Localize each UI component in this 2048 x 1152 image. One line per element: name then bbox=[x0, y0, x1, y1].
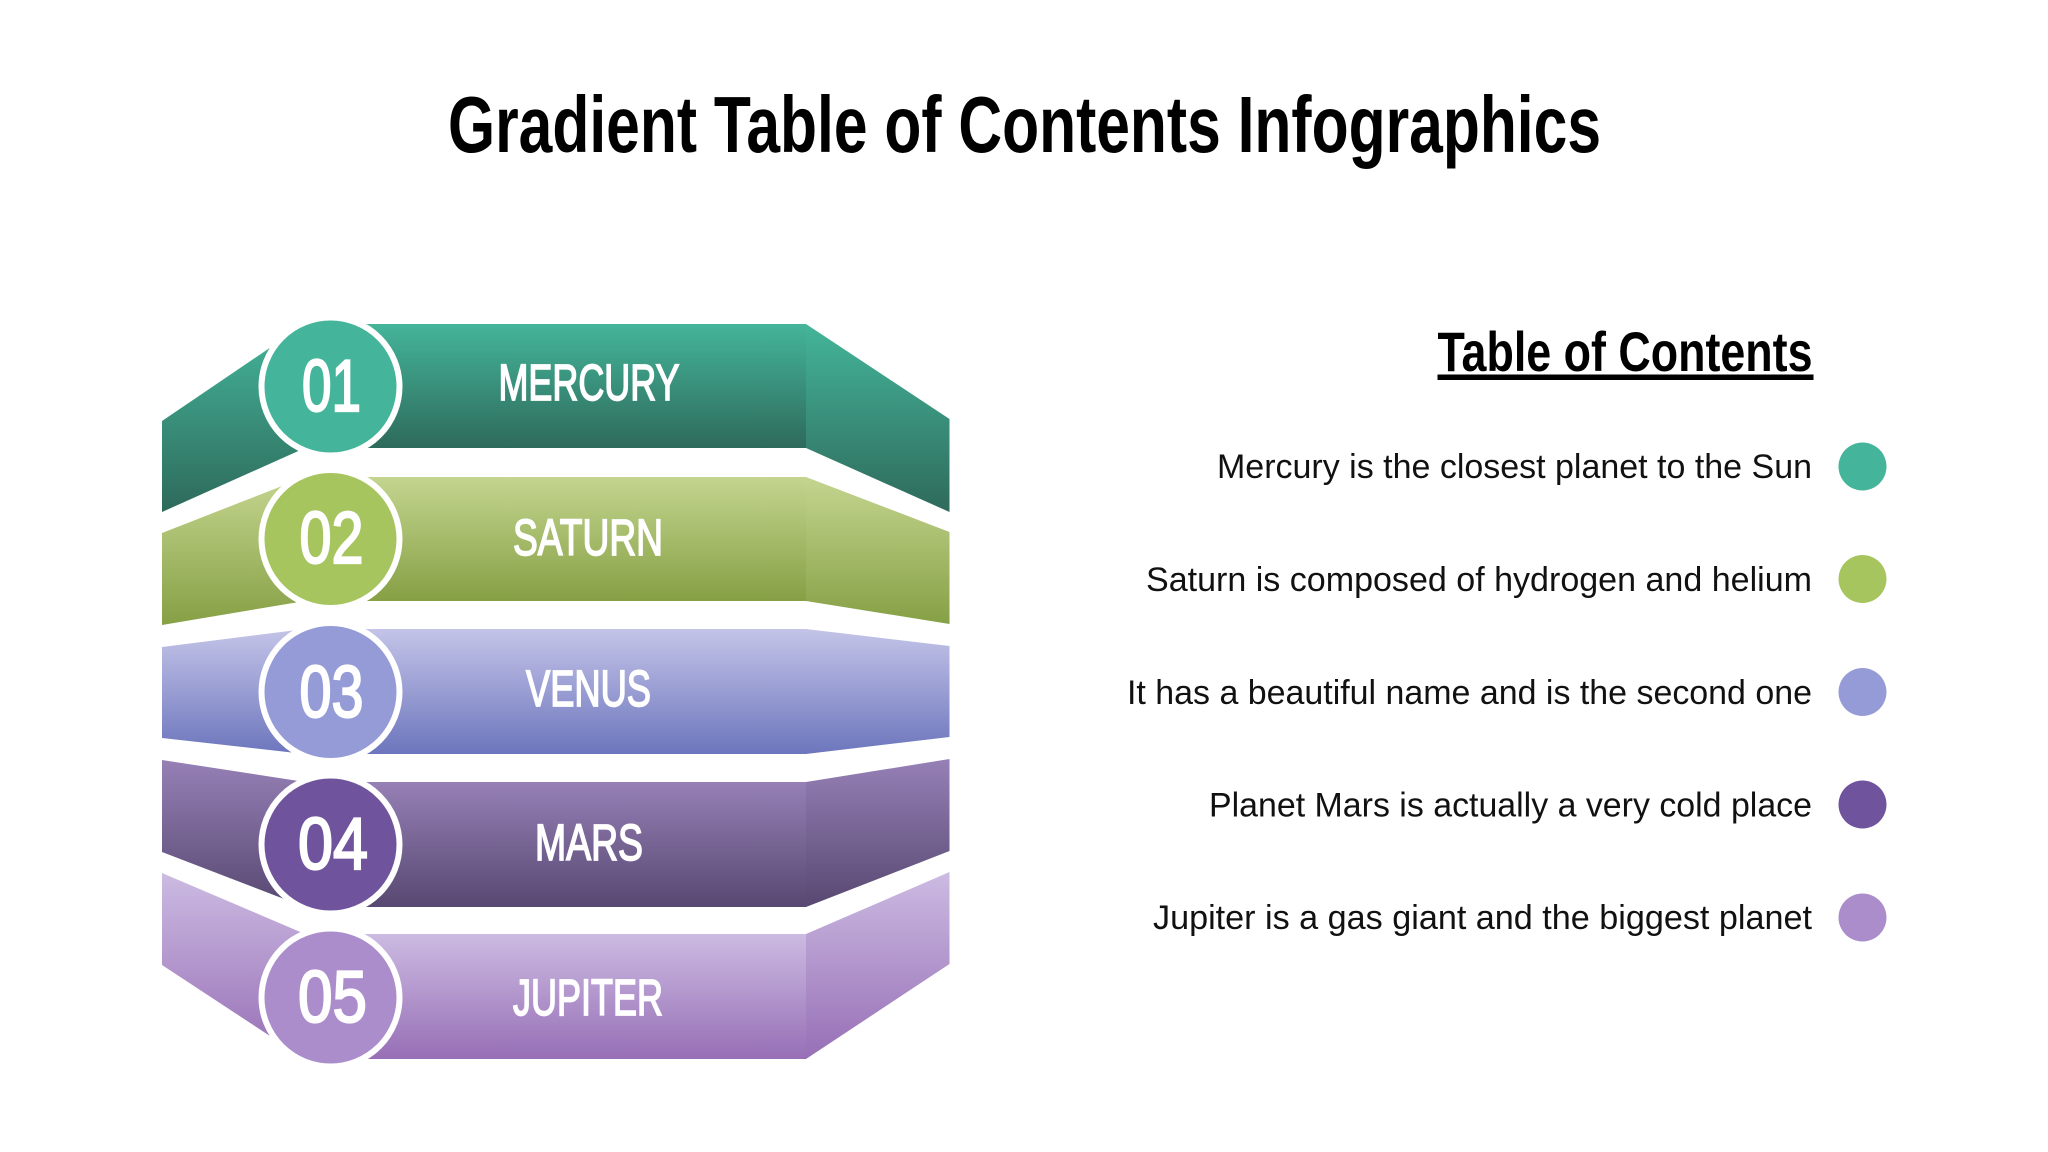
list item 3: It has a beautiful name and is the second one bbox=[1127, 674, 1812, 712]
ribbon 01 mercury bbox=[162, 318, 950, 512]
ribbon 05 jupiter: 05 bbox=[298, 957, 367, 1038]
heading: table of contents: Table of Contents bbox=[1438, 320, 1812, 383]
ribbon 05 jupiter: JUPITER bbox=[513, 969, 663, 1026]
ribbon 04 mars: MARS bbox=[535, 814, 643, 871]
ribbon 05 jupiter bbox=[162, 872, 950, 1066]
ribbon 01 mercury: 01 bbox=[302, 346, 361, 427]
list item 1: Mercury is the closest planet to the Sun bbox=[1217, 448, 1812, 486]
list item 2: Saturn is composed of hydrogen and helium bbox=[1146, 561, 1812, 599]
ribbon 04 mars bbox=[162, 759, 950, 914]
ribbon 02 saturn: SATURN bbox=[513, 509, 663, 566]
ribbon 02 saturn bbox=[162, 470, 950, 625]
ribbon 03 venus: VENUS bbox=[526, 660, 651, 717]
ribbon 01 mercury: MERCURY bbox=[498, 354, 680, 411]
panel: ribbon stack bbox=[162, 318, 950, 1066]
ribbon 04 mars: 04 bbox=[298, 804, 368, 885]
ribbon 03 venus: 03 bbox=[300, 652, 364, 733]
list item 4: Planet Mars is actually a very cold place bbox=[1209, 786, 1812, 824]
title: Gradient Table of Contents Infographics bbox=[448, 80, 1601, 169]
ribbon 02 saturn: 02 bbox=[300, 498, 364, 579]
ribbon 03 venus bbox=[162, 623, 950, 761]
list item 5: Jupiter is a gas giant and the biggest planet bbox=[1153, 899, 1813, 937]
